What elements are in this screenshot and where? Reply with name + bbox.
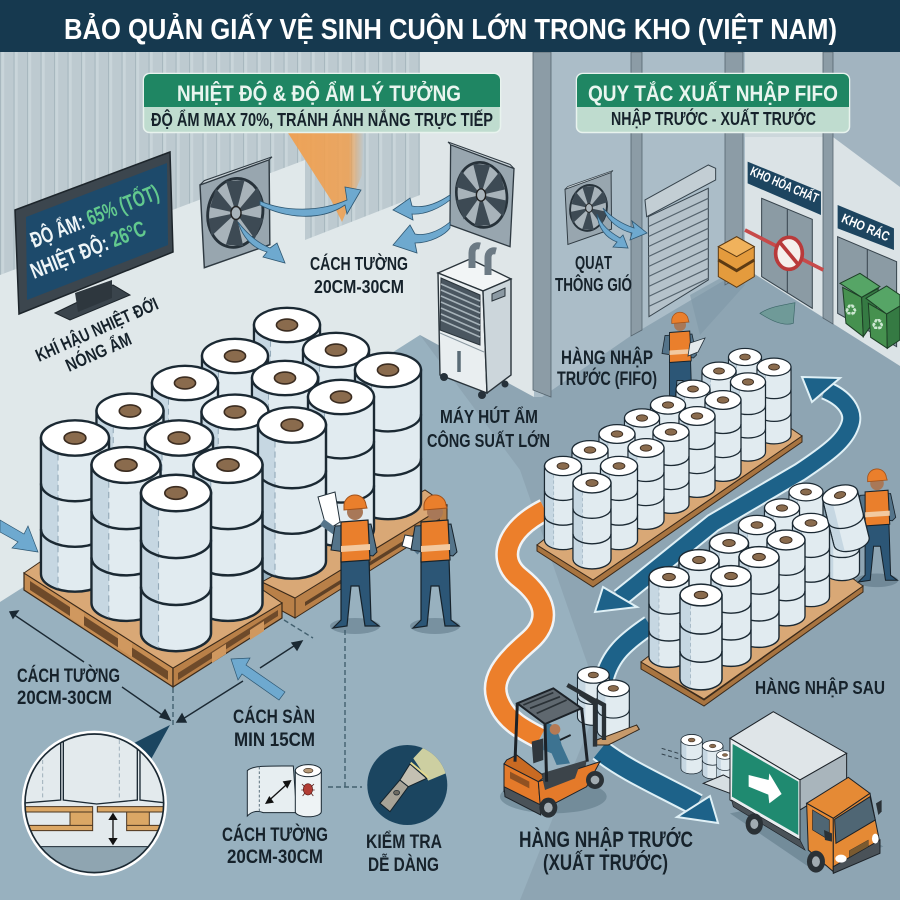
icon: paper roll with pest <box>247 765 321 817</box>
label: wall clearance top <box>310 253 408 297</box>
label: wall clearance roll: CÁCH TƯỜNG <box>222 822 328 846</box>
waste store and recycling bins <box>760 205 900 348</box>
panel: ideal temperature and humidity: ĐỘ ẨM MAX 70%, TRÁNH ÁNH NẮNG TRỰC TIẾP <box>151 109 493 130</box>
icon: flashlight <box>367 743 450 825</box>
delivery truck with loading rolls <box>662 712 883 873</box>
panel: FIFO rule: NHẬP TRƯỚC - XUẤT TRƯỚC <box>611 108 816 129</box>
label: goods received first, shipped first: (XUẤT TRƯỚC) <box>543 850 668 875</box>
clearance dimension arrows and dashes <box>10 611 362 787</box>
paper rolls, upper right row <box>544 348 791 569</box>
worker at FIFO rows <box>661 312 705 416</box>
right pallets <box>537 390 863 706</box>
monitor showing humidity and temperature: ĐỘ ẨM: 65% (TỐT) <box>26 179 162 253</box>
label: goods received first FIFO <box>557 347 657 390</box>
label: floor clearance <box>233 705 315 751</box>
label: goods received first, shipped first <box>519 827 693 875</box>
light blue arrows toward pallet <box>0 520 285 700</box>
label: tropical climate: NÓNG ẨM <box>62 328 135 376</box>
sunlight beam <box>288 133 364 222</box>
label: wall clearance roll <box>222 822 328 868</box>
panel: ideal temperature and humidity <box>144 74 500 132</box>
label: ventilation fan: THÔNG GIÓ <box>555 274 632 295</box>
label: wall clearance lower left: CÁCH TƯỜNG <box>17 663 120 687</box>
label: floor clearance: MIN 15CM <box>234 729 315 751</box>
wall pillars <box>533 52 833 397</box>
label: wall clearance top: CÁCH TƯỜNG <box>310 253 408 274</box>
left pallet first <box>24 500 282 687</box>
waste store and recycling bins: ♻ <box>872 318 884 331</box>
label: goods received first FIFO: TRƯỚC (FIFO) <box>557 368 657 390</box>
label: wall clearance roll: 20CM-30CM <box>227 846 323 868</box>
label: ventilation fan: QUẠT <box>575 252 612 273</box>
label: high capacity dehumidifier <box>427 406 550 451</box>
panel: FIFO rule <box>576 74 850 132</box>
blue FIFO route arrows <box>595 377 851 823</box>
orange flow path <box>496 510 545 738</box>
dehumidifier <box>438 246 511 399</box>
label: wall clearance top: 20CM-30CM <box>314 276 404 297</box>
label: wall clearance lower left <box>17 663 120 709</box>
label: goods received first FIFO: HÀNG NHẬP <box>561 347 653 369</box>
title banner <box>0 0 900 52</box>
label: easy inspection: DỄ DÀNG <box>368 853 439 876</box>
monitor showing humidity and temperature <box>15 152 173 320</box>
chemical store door and no-entry sign: KHO HÓA CHẤT <box>748 164 821 206</box>
label: high capacity dehumidifier: CÔNG SUẤT LỚN <box>427 430 550 451</box>
roller door and cartons <box>645 165 754 317</box>
label: goods received first, shipped first: HÀNG NHẬP TRƯỚC <box>519 827 693 852</box>
label: high capacity dehumidifier: MÁY HÚT ẨM <box>440 406 538 427</box>
left pallet second <box>262 490 447 618</box>
forklift with load <box>500 667 639 818</box>
label: tropical climate: KHÍ HẬU NHIỆT ĐỚI <box>32 293 161 366</box>
waste store and recycling bins: ♻ <box>845 304 857 317</box>
inspectors at left stack <box>318 492 460 634</box>
label: easy inspection <box>366 830 442 876</box>
stacked large paper rolls, left group <box>41 308 421 651</box>
chemical store door and no-entry sign <box>745 162 823 308</box>
panel: ideal temperature and humidity: NHIỆT ĐỘ & ĐỘ ẨM LÝ TƯỞNG <box>177 81 461 106</box>
label: tropical climate <box>32 293 161 376</box>
label: wall clearance lower left: 20CM-30CM <box>17 687 112 709</box>
worker lifting roll <box>856 469 898 587</box>
monitor showing humidity and temperature: NHIỆT ĐỘ: 26°C <box>27 216 149 284</box>
paper rolls, lower right row <box>649 482 871 690</box>
panel: FIFO rule: QUY TẮC XUẤT NHẬP FIFO <box>588 81 838 106</box>
label: floor clearance: CÁCH SÀN <box>233 705 315 728</box>
label: ventilation fan <box>555 252 632 295</box>
detail lens: pallet clearance <box>20 725 170 877</box>
label: easy inspection: KIỂM TRA <box>366 830 442 853</box>
wall fans with airflow arrows <box>200 142 647 268</box>
